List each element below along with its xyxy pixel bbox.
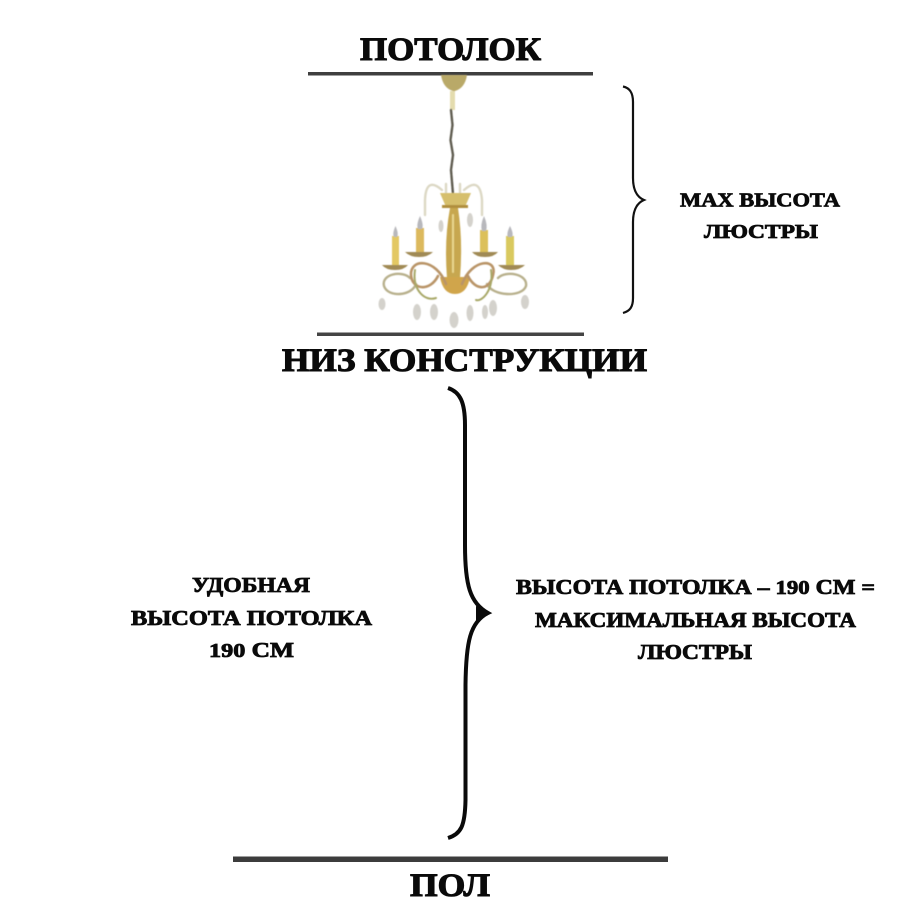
ceiling line [308, 72, 593, 76]
label: formula: ВЫСОТА ПОТОЛКА – 190 СМ = [516, 575, 875, 599]
label: comfortable height: ВЫСОТА ПОТОЛКА [131, 606, 373, 630]
label: comfortable height: 190 СМ [209, 638, 294, 662]
label: formula [516, 575, 875, 664]
chandelier upper bowl [440, 193, 471, 207]
chandelier base bowl [440, 277, 470, 294]
chandelier crystals [378, 213, 529, 328]
icon: chandelier [378, 75, 529, 328]
heading: floor: ПОЛ [410, 868, 490, 904]
heading: bottom of structure: НИЗ КОНСТРУКЦИИ [282, 343, 647, 379]
heading: ceiling: ПОТОЛОК [360, 32, 541, 68]
label: maximum chandelier height [680, 190, 841, 243]
label: maximum chandelier height: ЛЮСТРЫ [704, 221, 818, 243]
chandelier candles [392, 216, 514, 267]
label: formula: ЛЮСТРЫ [638, 640, 752, 664]
chandelier candle cups [382, 252, 525, 270]
bottom of structure line [317, 332, 584, 336]
label: maximum chandelier height: МАХ ВЫСОТА [680, 190, 841, 212]
chandelier canopy [441, 75, 467, 91]
label: comfortable height: УДОБНАЯ [192, 573, 310, 597]
chandelier chain [450, 110, 453, 194]
chandelier rod [450, 91, 455, 110]
brace: maximum chandelier height [623, 86, 644, 313]
floor line [233, 856, 668, 862]
chandelier upper glass arms [425, 184, 482, 215]
label: comfortable height [131, 573, 373, 662]
label: formula: МАКСИМАЛЬНАЯ ВЫСОТА [535, 608, 857, 632]
chandelier arms [384, 274, 526, 294]
brace: comfortable height [448, 388, 491, 838]
chandelier central stem [446, 208, 461, 278]
